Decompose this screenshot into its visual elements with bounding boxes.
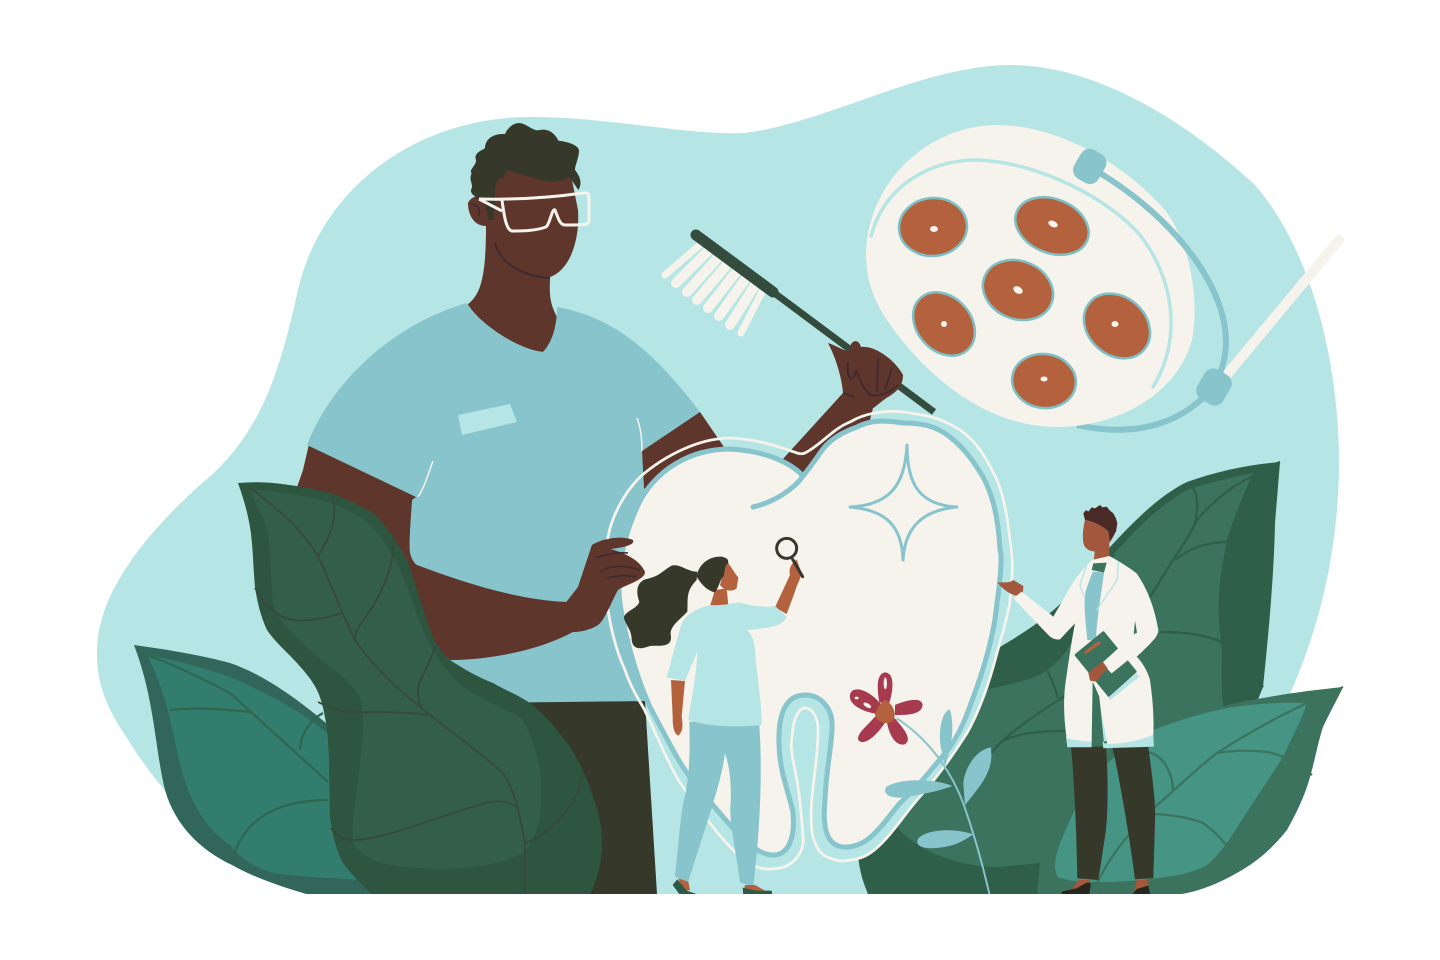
- toothbrush: [665, 235, 934, 412]
- flower stem: [897, 718, 990, 897]
- name tag: [458, 404, 517, 435]
- right back leaf: [858, 462, 1280, 894]
- man hair: [470, 123, 581, 220]
- lamp bulbs: [897, 187, 1163, 412]
- ear: [471, 204, 480, 216]
- shirt collar: [1092, 563, 1107, 573]
- head hair: [697, 557, 728, 593]
- man jaw line: [495, 243, 550, 278]
- man arm behind tooth: [642, 412, 726, 489]
- lamp inner arc: [871, 160, 1171, 387]
- neck: [710, 588, 728, 606]
- doctor trousers: [1071, 747, 1155, 880]
- clipboard: [1076, 633, 1139, 700]
- man: [296, 123, 934, 894]
- trousers: [675, 722, 761, 886]
- man trousers: [528, 701, 657, 894]
- lamp lower cable: [1077, 403, 1197, 430]
- front right leaf: [1037, 687, 1343, 894]
- left back leaf: [134, 645, 380, 895]
- lamp: [866, 125, 1339, 430]
- lamp head: [866, 125, 1195, 427]
- lowered arm: [671, 680, 685, 736]
- illustration: dental care scene: [96, 65, 1344, 894]
- shirt highlights: [418, 418, 642, 497]
- doctor: [997, 505, 1158, 894]
- man upper arm left: [297, 446, 416, 542]
- sparkle: [850, 445, 957, 560]
- flower: [850, 672, 991, 897]
- lamp upper cable: [1100, 173, 1226, 403]
- doctor hair: [1083, 505, 1117, 542]
- tooth white outline: [605, 411, 1012, 869]
- safety glasses: [479, 193, 589, 231]
- face: [720, 562, 738, 591]
- petals: [850, 672, 923, 745]
- plant leaves: [885, 709, 991, 848]
- doctor face: [1083, 520, 1114, 551]
- lamp handle stick: [1225, 240, 1339, 377]
- background blob: [97, 65, 1339, 894]
- doctor outstretched hand: [997, 580, 1023, 596]
- man hand on tooth: [560, 538, 645, 632]
- lapel detail: [1080, 562, 1118, 610]
- petal highlights: [855, 677, 887, 709]
- magnifier: [777, 538, 803, 577]
- coat sleeve over clipboard: [1102, 600, 1158, 673]
- doctor neck: [1093, 540, 1109, 564]
- bristles: [665, 243, 763, 333]
- tooth outline band: [619, 421, 1001, 855]
- forearm raised: [782, 393, 873, 476]
- tooth gap fill: [858, 656, 995, 857]
- man lower arm: [408, 500, 624, 660]
- raised forearm: [775, 559, 802, 614]
- brush handle: [696, 235, 773, 292]
- top: [667, 602, 787, 726]
- flower centre: [875, 700, 895, 723]
- tooth: [605, 411, 1012, 869]
- ponytail: [624, 565, 697, 648]
- raised hand: [828, 341, 903, 411]
- doctor feet and shoes: [1062, 880, 1150, 894]
- doctor hand on clipboard: [1088, 662, 1108, 682]
- big front leaf: [238, 482, 602, 895]
- lab coat lining: [1066, 693, 1154, 748]
- woman: [624, 538, 803, 895]
- lamp knobs: [1069, 145, 1235, 409]
- man neck and head: [467, 170, 578, 352]
- man t-shirt: [307, 303, 700, 703]
- lab coat: [1013, 556, 1158, 744]
- sleeve gap: [1134, 621, 1137, 634]
- feet and shoes: [673, 878, 772, 895]
- tooth body: [619, 421, 1001, 855]
- doctor shirt: [1085, 572, 1104, 641]
